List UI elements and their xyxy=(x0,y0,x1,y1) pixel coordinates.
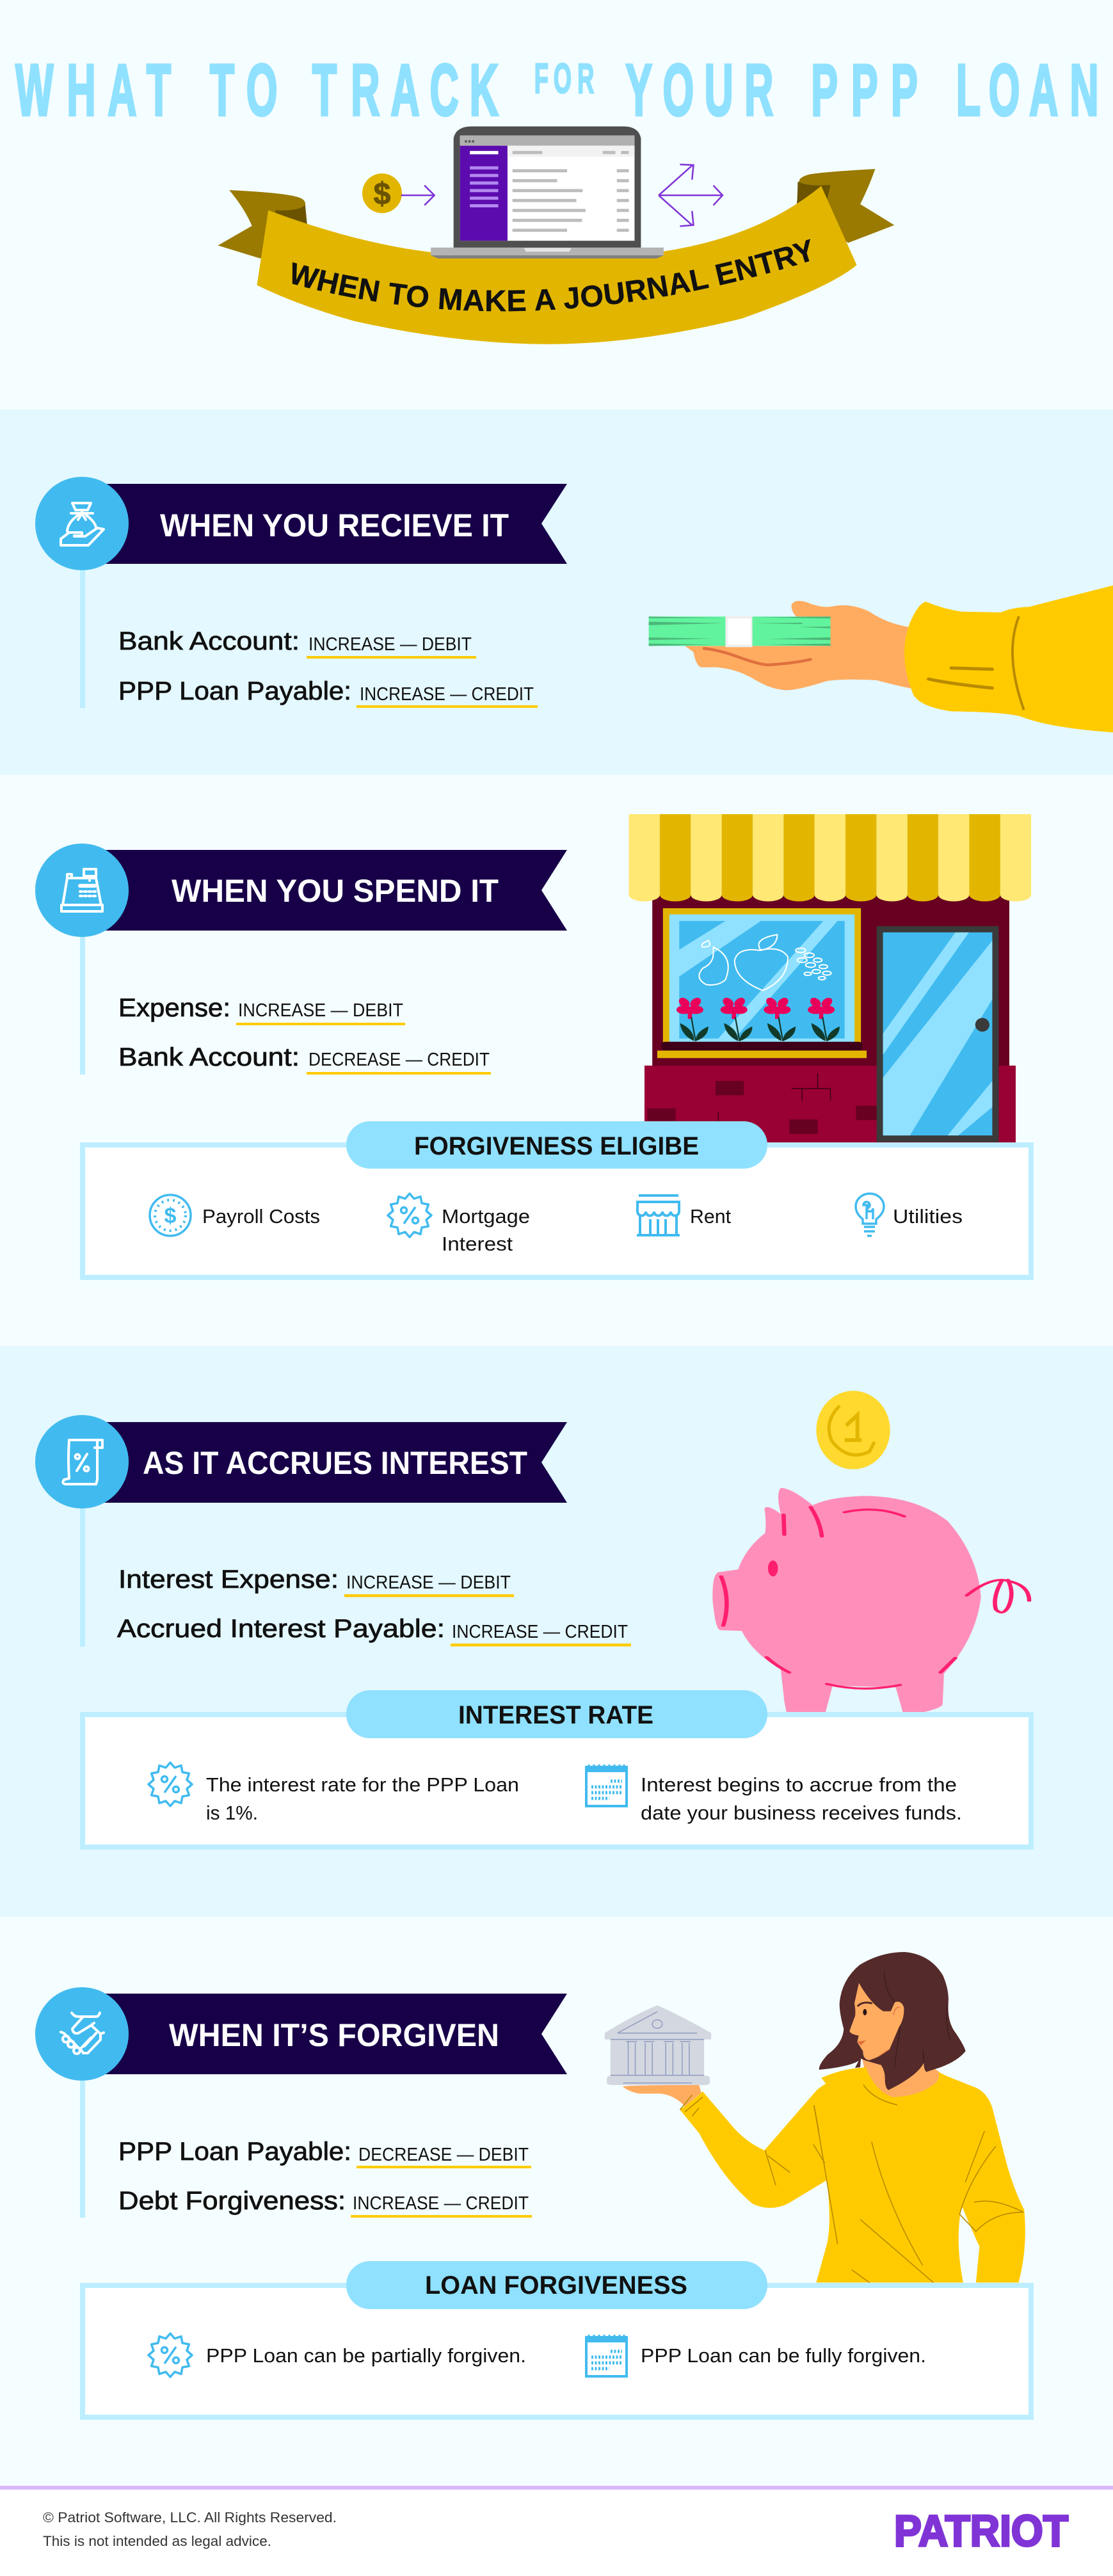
heading text: AS IT ACCRUES INTEREST xyxy=(143,1445,527,1481)
logo: Patriot: PATRIOT xyxy=(894,2506,1068,2556)
item: interest rate note: The interest rate for the PPP Loan xyxy=(206,1773,519,1796)
entry: expense xyxy=(118,994,405,1025)
item: rent: Rent xyxy=(690,1205,731,1228)
icon: handshake xyxy=(35,1987,129,2081)
item: interest rate note xyxy=(148,1763,519,1824)
title: YOUR xyxy=(625,50,773,131)
footer divider xyxy=(0,2486,1113,2490)
item: accrual note: Interest begins to accrue from the xyxy=(641,1773,957,1796)
title: LOAN xyxy=(956,50,1099,131)
item: payroll costs: $ xyxy=(164,1204,177,1228)
item: partially forgiven: PPP Loan can be partially forgiven. xyxy=(206,2344,526,2367)
timeline line xyxy=(80,1498,85,1647)
footer text: This is not intended as legal advice. xyxy=(43,2533,271,2549)
entry: ppp loan payable xyxy=(118,677,538,708)
panel: forgiveness eligible xyxy=(83,1121,1031,1277)
entry: ppp loan payable: PPP Loan Payable: xyxy=(118,2138,351,2166)
item: interest rate note: is 1%. xyxy=(206,1802,258,1824)
timeline line xyxy=(80,928,85,1075)
entry: bank account: Bank Account: xyxy=(118,1043,300,1071)
item: utilities xyxy=(856,1194,963,1236)
illustration: hand holding cash xyxy=(649,557,1113,738)
entry: bank account: Bank Account: xyxy=(118,627,300,655)
heading ribbon xyxy=(83,1422,567,1503)
title: PPP xyxy=(811,50,918,131)
item: accrual note: date your business receives funds. xyxy=(641,1802,962,1824)
icon: dollar coin xyxy=(362,173,402,213)
heading ribbon xyxy=(83,1994,567,2074)
section: when it's forgiven xyxy=(35,1987,567,2218)
item: rent xyxy=(637,1196,731,1235)
entry: ppp loan payable xyxy=(118,2138,531,2168)
icon: money bag in hand xyxy=(35,477,129,570)
timeline line xyxy=(80,563,85,708)
pill heading xyxy=(346,1690,767,1738)
item: mortgage interest: Mortgage xyxy=(442,1205,530,1228)
entry: debt forgiveness: Debt Forgiveness: xyxy=(118,2187,346,2215)
pill heading: LOAN FORGIVENESS xyxy=(425,2271,687,2300)
footer text: © Patriot Software, LLC. All Rights Reserved. xyxy=(43,2509,337,2525)
icon: percent scroll xyxy=(35,1415,129,1508)
title: WHAT xyxy=(15,50,171,131)
heading text: WHEN YOU RECIEVE IT xyxy=(160,508,509,543)
section: when you spend it xyxy=(35,844,567,1075)
entry: interest expense: Interest Expense: xyxy=(118,1565,339,1594)
entry: interest expense xyxy=(118,1565,514,1597)
entry: ppp loan payable: PPP Loan Payable: xyxy=(118,677,351,705)
timeline line xyxy=(80,2074,85,2218)
banner text: WHEN TO MAKE A JOURNAL ENTRY xyxy=(292,239,810,311)
item: mortgage interest xyxy=(388,1194,530,1255)
pill heading: INTEREST RATE xyxy=(458,1701,653,1729)
item: payroll costs: Payroll Costs xyxy=(202,1205,320,1228)
section: as it accrues interest xyxy=(35,1415,631,1647)
entry: accrued interest payable: Accrued Interest Payable: xyxy=(117,1615,445,1643)
entry: debt forgiveness: INCREASE — CREDIT xyxy=(353,2193,529,2214)
item: fully forgiven: PPP Loan can be fully forgiven. xyxy=(641,2344,926,2367)
arrow: money in xyxy=(401,186,435,205)
item: payroll costs xyxy=(150,1195,320,1236)
entry: accrued interest payable: INCREASE — CREDIT xyxy=(452,1622,628,1642)
entry: bank account: DECREASE — CREDIT xyxy=(308,1050,490,1070)
laptop xyxy=(431,126,664,259)
footer text xyxy=(43,2509,337,2549)
panel: interest rate xyxy=(83,1690,1031,1847)
title: TRACK xyxy=(312,50,499,131)
illustration: woman holding bank xyxy=(605,1952,1025,2283)
heading text: WHEN IT’S FORGIVEN xyxy=(169,2017,499,2053)
entry: ppp loan payable: DECREASE — DEBIT xyxy=(358,2145,529,2165)
title: FOR xyxy=(534,56,594,102)
panel: loan forgiveness xyxy=(83,2261,1031,2417)
item: utilities: Utilities xyxy=(893,1205,963,1228)
pill heading xyxy=(346,2261,767,2309)
pill heading xyxy=(346,1121,767,1169)
entry: debt forgiveness xyxy=(118,2187,532,2218)
entry: ppp loan payable: INCREASE — CREDIT xyxy=(360,684,534,705)
entry: expense: INCREASE — DEBIT xyxy=(238,1000,403,1021)
item: accrual note xyxy=(585,1764,962,1824)
entry: bank account xyxy=(118,627,476,659)
heading ribbon xyxy=(83,484,567,564)
entry: interest expense: INCREASE — DEBIT xyxy=(346,1572,511,1593)
arrows: money out xyxy=(659,164,723,226)
section: when you receive it xyxy=(35,477,567,708)
item: partially forgiven xyxy=(148,2333,526,2377)
entry: expense: Expense: xyxy=(118,994,230,1022)
icon: cash register xyxy=(35,844,129,937)
ribbon banner xyxy=(218,169,895,344)
title xyxy=(15,50,1099,131)
entry: bank account: INCREASE — DEBIT xyxy=(308,634,472,655)
heading text: WHEN YOU SPEND IT xyxy=(172,873,499,909)
bank xyxy=(605,2005,711,2085)
heading ribbon xyxy=(83,850,567,931)
icon: dollar coin: $ xyxy=(374,177,391,211)
head xyxy=(814,1952,966,2131)
item: mortgage interest: Interest xyxy=(442,1233,513,1255)
item: fully forgiven xyxy=(585,2335,926,2376)
illustration: storefront xyxy=(629,814,1031,1142)
entry: bank account xyxy=(118,1043,491,1075)
pill heading: FORGIVENESS ELIGIBE xyxy=(414,1132,699,1160)
entry: accrued interest payable xyxy=(117,1615,631,1646)
title: TO xyxy=(210,50,278,131)
coin xyxy=(816,1391,890,1469)
illustration: piggy bank xyxy=(712,1391,1029,1713)
